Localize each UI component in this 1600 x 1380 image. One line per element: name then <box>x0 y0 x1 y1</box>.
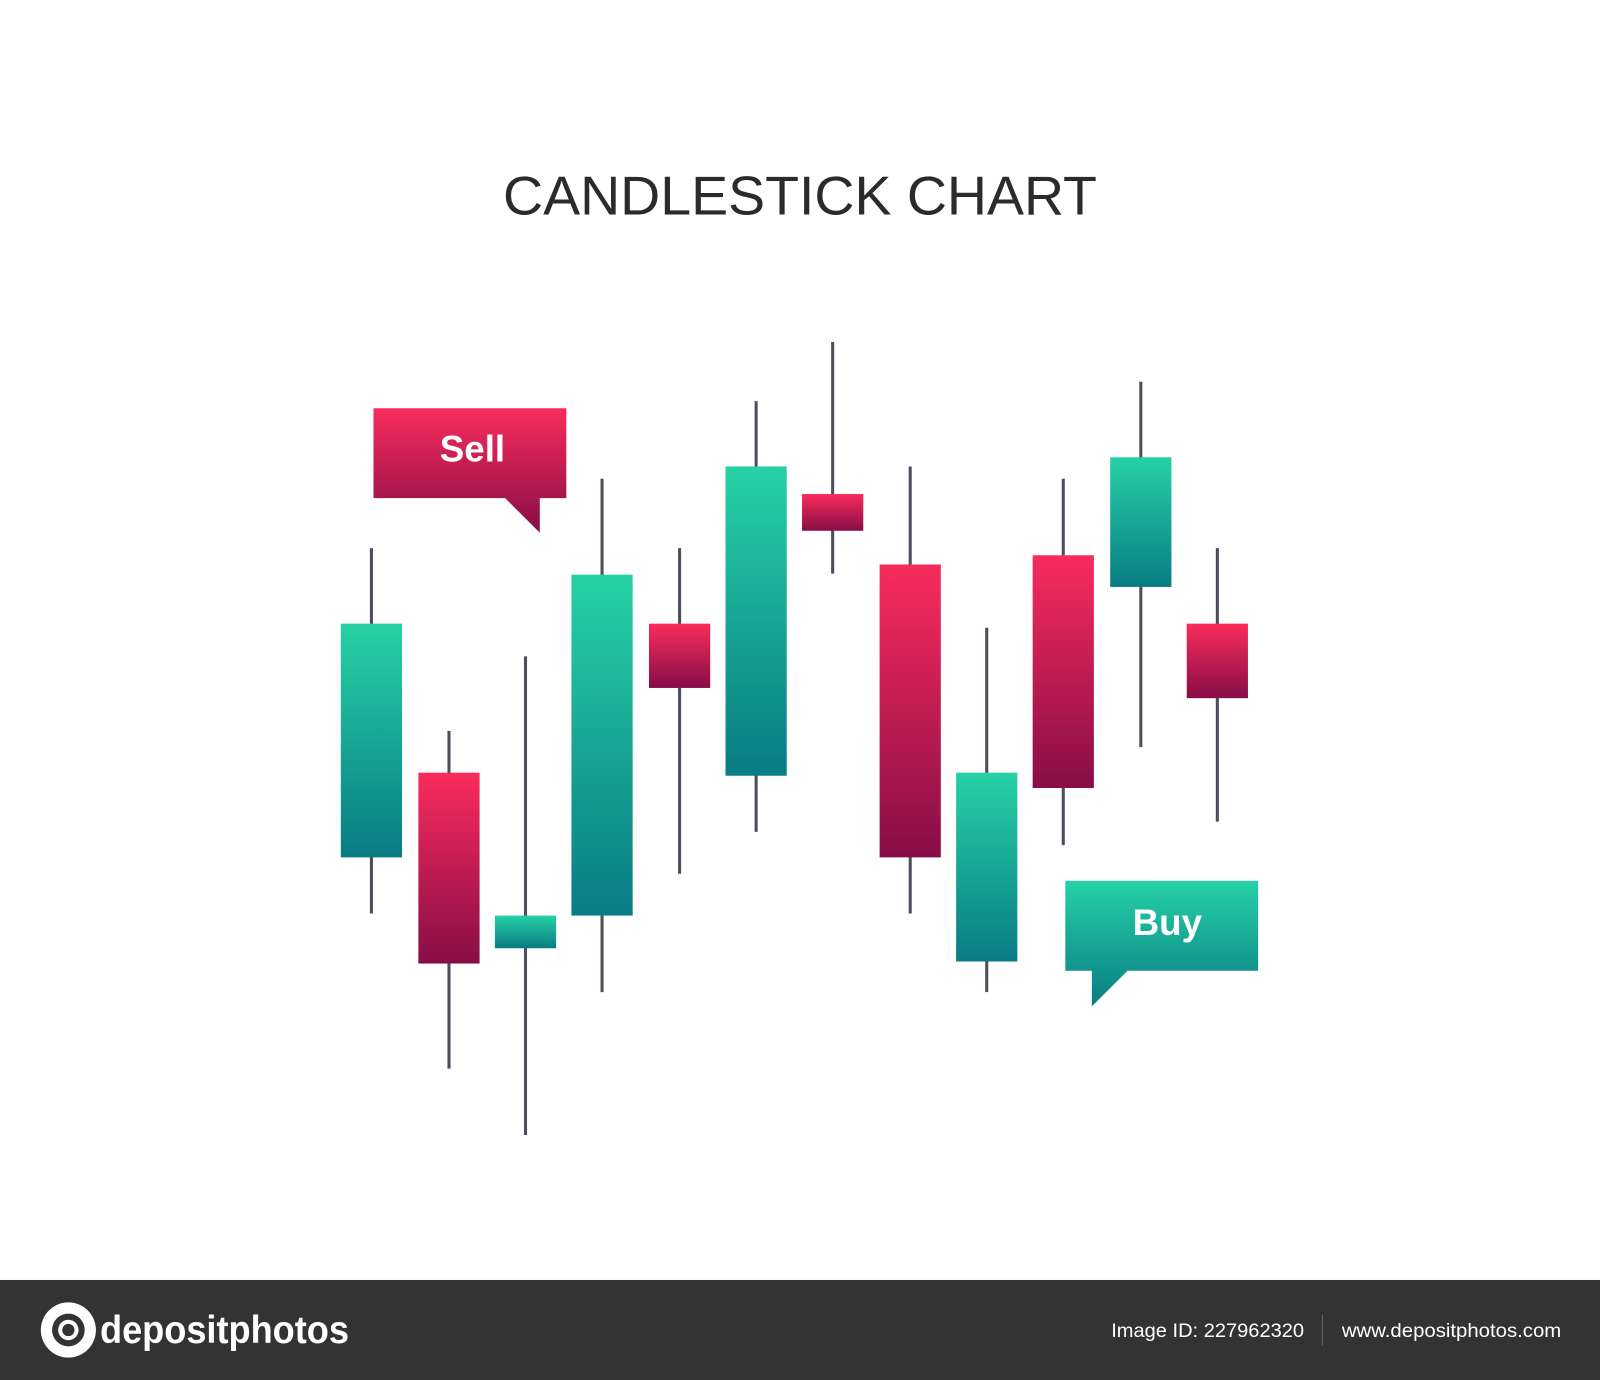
candle 12 <box>1187 548 1248 822</box>
candle 5 <box>649 548 710 874</box>
logo text: depositphotos <box>100 1309 349 1352</box>
callout: buy: Buy <box>1133 902 1203 943</box>
callout: sell <box>373 408 566 533</box>
image id: Image ID: 227962320 <box>1111 1320 1304 1342</box>
candle 11 <box>1110 382 1171 747</box>
candlestick chart <box>341 342 1248 1135</box>
website: www.depositphotos.com <box>1341 1320 1561 1342</box>
candle 1 <box>341 548 402 914</box>
candle 7 <box>802 342 863 574</box>
candle 2 <box>418 731 480 1069</box>
callout: buy <box>1065 881 1258 1006</box>
callout: sell: Sell <box>440 428 505 469</box>
candle 4 <box>571 479 633 992</box>
footer bar <box>0 1280 1600 1380</box>
candle 10 <box>1033 479 1094 845</box>
candle 9 <box>956 628 1017 992</box>
candle 8 <box>880 466 941 914</box>
candle 3 <box>495 656 556 1135</box>
icon: camera logo <box>41 1302 96 1358</box>
candle 6 <box>726 401 787 832</box>
title: CANDLESTICK CHART <box>503 164 1097 226</box>
